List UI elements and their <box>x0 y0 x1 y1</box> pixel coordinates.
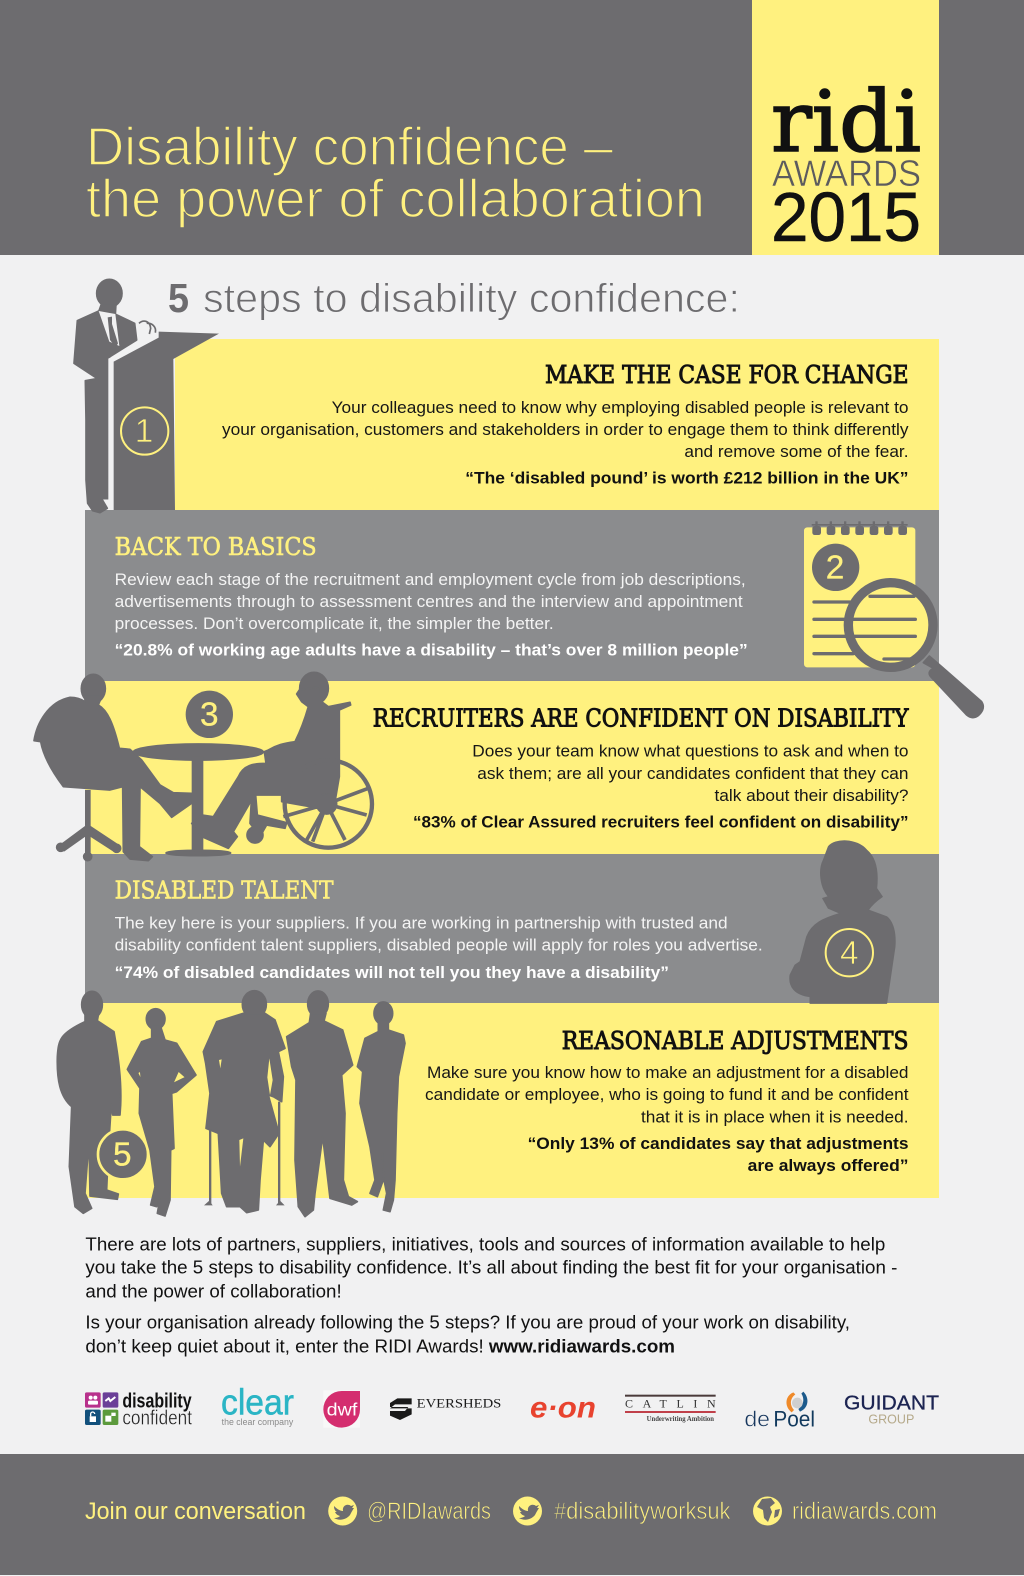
heading 3: RECRUITERS ARE CONFIDENT ON DISABILITY <box>373 705 910 733</box>
website <box>753 1496 937 1526</box>
body 3 <box>472 743 908 805</box>
heading 5: REASONABLE ADJUSTMENTS <box>562 1027 908 1055</box>
body 5: candidate or employee, who is going to fund it and be confident <box>425 1086 909 1104</box>
logo: guidant group <box>844 1392 939 1426</box>
illustration: group of five people with number 5 <box>57 991 405 1217</box>
seated candidate and chair <box>34 674 192 861</box>
body 2: advertisements through to assessment centres and the interview and appointment <box>115 593 743 611</box>
body 2: Review each stage of the recruitment and employment cycle from job descriptions, <box>115 571 746 589</box>
body 4 <box>115 914 763 955</box>
logo: dwf <box>323 1390 360 1428</box>
panel 4: disabled talent <box>85 854 939 1003</box>
header band <box>0 0 1024 255</box>
footer band <box>0 1454 1024 1575</box>
illustration: interview at table with wheelchair user and number 3 <box>34 672 372 861</box>
logo: disability confident: disability <box>122 1390 192 1412</box>
heading 2: BACK TO BASICS <box>115 533 317 561</box>
body 3: ask them; are all your candidates confident that they can <box>477 765 908 783</box>
person 1 <box>57 991 121 1213</box>
logo: eversheds: EVERSHEDS <box>417 1397 501 1411</box>
ridi awards 2015 logo panel <box>752 0 939 256</box>
number 5 <box>98 1129 148 1179</box>
closing text <box>85 1234 897 1357</box>
heading 4: DISABLED TALENT <box>115 876 334 904</box>
ridi awards 2015 logo panel: AWARDS <box>772 153 921 194</box>
closing text: you take the 5 steps to disability confidence. It’s all about finding the best fit for your organisation - <box>85 1258 897 1278</box>
body 5: Make sure you know how to make an adjustment for a disabled <box>427 1064 908 1082</box>
number 3: 3 <box>200 697 219 734</box>
number 4 <box>826 929 873 976</box>
logo: disability confident: confident <box>122 1407 192 1429</box>
closing text: There are lots of partners, suppliers, initiatives, tools and sources of information available to help <box>85 1234 885 1254</box>
logo: de Poel <box>744 1392 815 1432</box>
panel 3: recruiters are confident on disability <box>85 681 939 854</box>
subheading: 5 steps: 5 <box>168 275 189 321</box>
number 2 <box>812 544 859 591</box>
spiral binding <box>812 521 908 535</box>
body 4: disability confident talent suppliers, disabled people will apply for roles you advertise. <box>115 937 763 955</box>
panel 1: make the case for change <box>175 339 939 510</box>
quote 2: “20.8% of working age adults have a disability – that’s over 8 million people” <box>115 642 748 660</box>
body 3: talk about their disability? <box>714 787 908 805</box>
closing text: and the power of collaboration! <box>85 1282 342 1302</box>
quote 5 <box>528 1135 908 1175</box>
heading 1: MAKE THE CASE FOR CHANGE <box>545 361 908 389</box>
person 2 <box>127 1009 196 1216</box>
logo: catlin <box>625 1395 716 1423</box>
subheading: 5 steps: steps to disability confidence: <box>203 275 740 321</box>
number 4: 4 <box>840 935 859 972</box>
logo: clear: the clear company <box>222 1417 294 1427</box>
title: Disability confidence – <box>86 117 613 177</box>
body 1: and remove some of the fear. <box>684 443 908 461</box>
ridi awards 2015 logo panel: 2015 <box>771 178 921 256</box>
logo: guidant group: GUIDANT <box>844 1392 939 1414</box>
icon: speaker at lectern with number 1 <box>74 279 219 513</box>
title: the power of collaboration <box>86 169 705 229</box>
body 1: your organisation, customers and stakeholders in order to engage them to think differently <box>222 421 909 439</box>
body 2: processes. Don’t overcomplicate it, the simpler the better. <box>115 615 554 633</box>
twitter handle: @RIDIawards <box>367 1498 491 1525</box>
quote 5: “Only 13% of candidates say that adjustments <box>528 1135 908 1153</box>
quote 3: “83% of Clear Assured recruiters feel confident on disability” <box>413 814 908 832</box>
table <box>133 744 263 856</box>
ridi awards 2015 logo panel: ridi <box>771 73 921 171</box>
quote 5: are always offered” <box>748 1157 908 1175</box>
number 1: 1 <box>135 413 153 450</box>
logo: disability confident <box>85 1390 192 1429</box>
partner logos: right group <box>530 1392 939 1432</box>
body 3: Does your team know what questions to ask and when to <box>472 743 908 761</box>
body 2 <box>115 571 746 633</box>
join our conversation: Join our conversation <box>85 1498 306 1525</box>
quote 1: “The ‘disabled pound’ is worth £212 billion in the UK” <box>465 470 908 488</box>
logo: e-on: e·on <box>530 1392 596 1425</box>
twitter handle <box>328 1496 491 1526</box>
number 1 <box>121 407 168 455</box>
logo: dwf: dwf <box>327 1400 358 1420</box>
illustration: woman silhouette with number 4 <box>790 841 895 1003</box>
logo: de Poel: de <box>744 1407 770 1432</box>
website: ridiawards.com <box>792 1498 937 1525</box>
person 3 with crutches <box>203 991 285 1213</box>
person 4 <box>287 991 357 1217</box>
title <box>86 117 705 229</box>
body 5: that it is in place when it is needed. <box>641 1108 908 1126</box>
logo: catlin: Underwriting Ambition <box>647 1414 714 1423</box>
body 5 <box>425 1064 909 1126</box>
number 5: 5 <box>113 1136 132 1173</box>
closing text: Is your organisation already following the 5 steps? If you are proud of your work on disability, <box>85 1312 850 1332</box>
logo: clear: clear <box>221 1381 294 1422</box>
number 3 <box>186 691 233 738</box>
body 4: The key here is your suppliers. If you are working in partnership with trusted and <box>115 914 728 932</box>
number 2: 2 <box>826 550 844 587</box>
icon: notepad and magnifying glass with number 2 <box>804 521 983 718</box>
panel 2: back to basics <box>85 510 939 681</box>
twitter hashtag: #disabilityworksuk <box>554 1498 731 1525</box>
logo: de Poel: Poel <box>773 1407 815 1432</box>
person 5 <box>357 1002 405 1212</box>
body 1 <box>222 399 909 461</box>
quote 4: “74% of disabled candidates will not tell you they have a disability” <box>115 964 669 982</box>
partner logos: left group <box>85 1381 501 1429</box>
wheelchair user <box>192 672 372 848</box>
body 1: Your colleagues need to know why employing disabled people is relevant to <box>332 399 909 417</box>
logo: eversheds <box>390 1397 501 1420</box>
closing text: don’t keep quiet about it, enter the RIDI Awards! www.ridiawards.com <box>85 1337 675 1357</box>
panel 5: reasonable adjustments <box>85 1003 939 1198</box>
logo: catlin: CATLIN <box>625 1397 716 1411</box>
logo: guidant group: GROUP <box>868 1412 914 1426</box>
